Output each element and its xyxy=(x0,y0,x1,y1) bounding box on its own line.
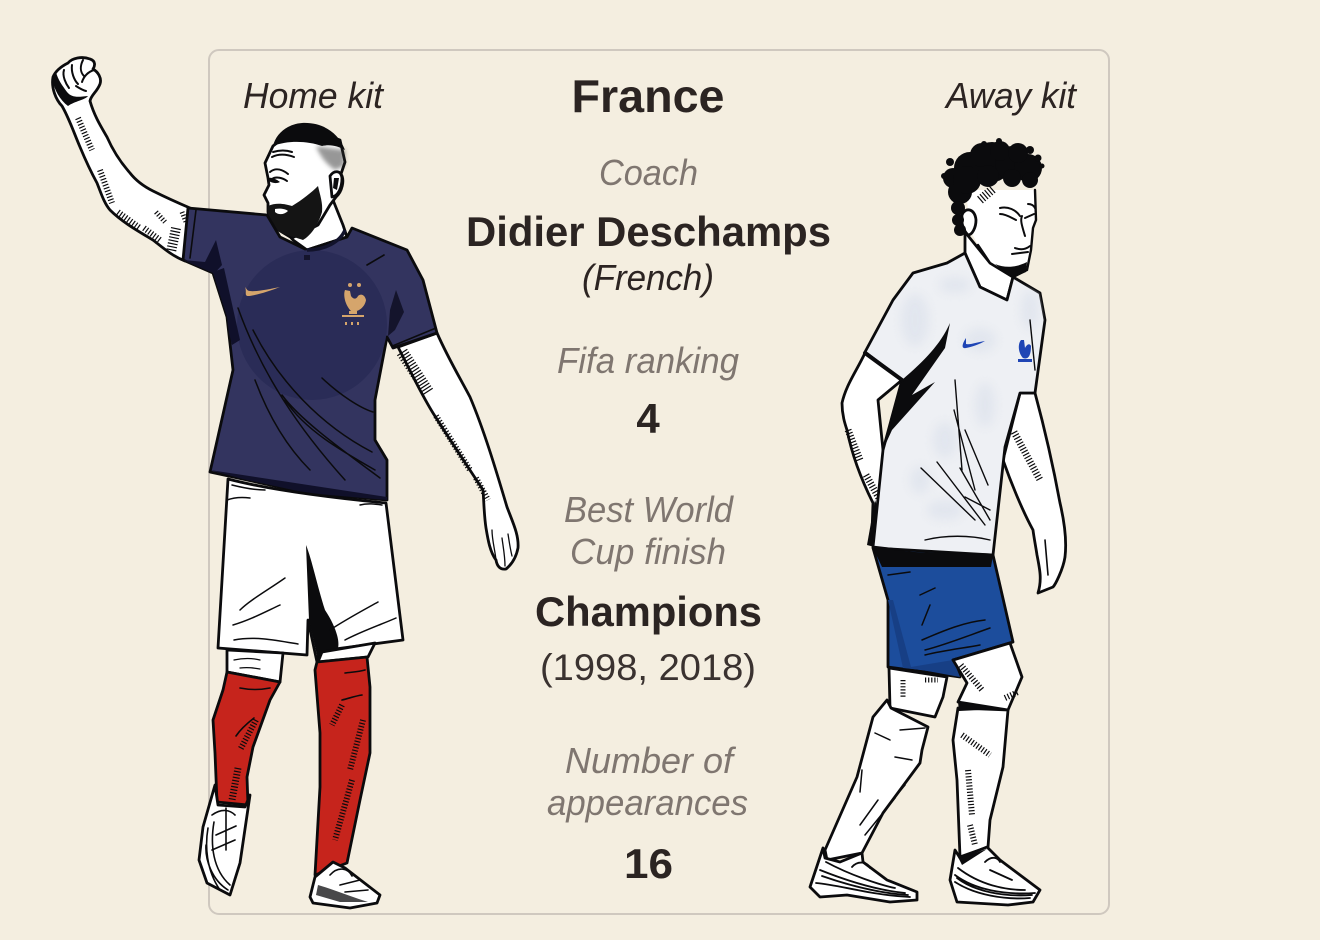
shirt collar xyxy=(307,230,345,250)
away shorts xyxy=(873,548,1013,677)
icon: button xyxy=(304,255,310,260)
panel: team card frame xyxy=(209,50,1109,914)
icon: swoosh, gold xyxy=(245,287,280,296)
text block: best World Cup finish: (1998, 2018) xyxy=(540,647,756,688)
finger lines xyxy=(882,530,1048,575)
black under-shirt shadow xyxy=(867,500,893,552)
icon: swoosh, blue xyxy=(963,338,985,348)
heading: France: France xyxy=(572,70,724,122)
away shirt xyxy=(865,253,1045,555)
thighs xyxy=(889,643,1022,717)
lowered arm and hand xyxy=(398,333,518,569)
text block: number of appearances: Number of xyxy=(565,740,737,781)
sleeve edge xyxy=(865,353,902,380)
text block: best World Cup finish: Champions xyxy=(535,588,762,635)
icon: crest, blue xyxy=(1018,340,1032,362)
heading: home kit: Home kit xyxy=(243,75,385,116)
home shirt xyxy=(183,208,437,503)
text block: FIFA ranking: Fifa ranking xyxy=(557,340,739,381)
illustration: player in away kit xyxy=(810,138,1066,905)
right arm xyxy=(1003,393,1066,593)
icon: crest, gold rooster xyxy=(342,283,366,325)
text block: FIFA ranking: 4 xyxy=(636,395,660,442)
away boots xyxy=(810,847,1040,905)
text block: best World Cup finish xyxy=(535,489,762,688)
text block: FIFA ranking xyxy=(557,340,739,442)
white socks xyxy=(825,700,1008,860)
text block: number of appearances xyxy=(547,740,748,887)
thighs xyxy=(227,643,375,682)
text block: coach: (French) xyxy=(582,257,714,298)
neck xyxy=(272,200,347,250)
text block: number of appearances: 16 xyxy=(624,840,673,887)
left arm xyxy=(842,353,915,553)
head xyxy=(962,188,1036,278)
home boots xyxy=(199,785,380,908)
arm hatching xyxy=(848,395,1040,500)
head xyxy=(264,123,345,240)
illustration: player in home kit xyxy=(52,58,518,908)
text block: coach: Coach xyxy=(599,152,698,193)
heading: away kit: Away kit xyxy=(944,75,1078,116)
text block: best World Cup finish: Best World xyxy=(564,489,734,530)
raised arm and fist xyxy=(52,58,190,261)
home shorts xyxy=(218,479,403,662)
neck xyxy=(965,232,1013,300)
text block: coach xyxy=(466,152,831,298)
red socks xyxy=(213,657,370,875)
hair xyxy=(941,138,1044,236)
text block: best World Cup finish: Cup finish xyxy=(570,531,726,572)
text block: coach: Didier Deschamps xyxy=(466,208,831,255)
text block: number of appearances: appearances xyxy=(547,782,748,823)
